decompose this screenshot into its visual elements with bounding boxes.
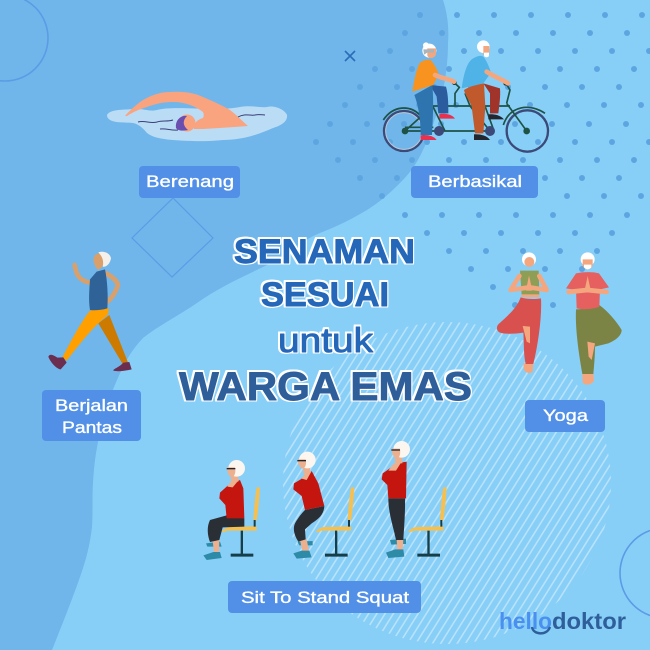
label: Berbasikal: Berbasikal xyxy=(428,172,522,191)
standing woman xyxy=(382,441,410,558)
decorative cross xyxy=(345,51,355,61)
title line: SESUAI: SESUAI xyxy=(261,276,389,314)
swim cap xyxy=(176,116,188,131)
logo: hellodoktor xyxy=(499,608,626,634)
water ripples xyxy=(138,115,265,130)
dot pattern xyxy=(313,12,650,308)
title xyxy=(179,233,472,409)
icon: yoga couple xyxy=(497,252,622,385)
icon: sit to stand squat xyxy=(203,441,447,560)
squatting woman xyxy=(293,452,324,559)
label: Yoga: Yoga xyxy=(543,406,589,425)
title line: untuk: untuk xyxy=(278,322,374,360)
decorative circle top left xyxy=(0,0,48,81)
yoga man xyxy=(566,252,622,385)
far leg xyxy=(98,315,128,364)
label: Yoga xyxy=(525,400,605,432)
swimmer body xyxy=(125,92,248,129)
head xyxy=(93,253,104,270)
title line: WARGA EMAS: WARGA EMAS xyxy=(179,365,472,409)
label: Sit To Stand Squat: Sit To Stand Squat xyxy=(241,588,409,607)
near leg xyxy=(62,308,109,361)
logo: hellodoktor: hello xyxy=(499,608,552,634)
arms xyxy=(75,265,118,302)
darker background blob xyxy=(0,0,448,650)
label: Berjalan Pantas: Pantas xyxy=(62,418,122,437)
decorative circle bottom right xyxy=(620,528,650,618)
title line: SENAMAN: SENAMAN xyxy=(234,233,415,271)
label: Berenang xyxy=(139,166,240,198)
sitting woman xyxy=(203,460,245,560)
hair xyxy=(98,252,111,267)
logo: hellodoktor: doktor xyxy=(552,608,626,634)
hatched circle xyxy=(283,322,611,644)
top xyxy=(89,269,108,310)
label: Berjalan Pantas: Berjalan xyxy=(55,396,128,415)
icon: tandem bicycle riders xyxy=(383,40,548,152)
woman rider xyxy=(412,42,455,140)
label: Berbasikal xyxy=(411,166,538,198)
water xyxy=(107,106,287,141)
man rider xyxy=(462,40,508,140)
bicycle xyxy=(383,80,548,152)
shoes xyxy=(48,355,132,371)
chair 3 xyxy=(408,487,447,557)
chair 2 xyxy=(316,487,354,557)
icon: brisk walker xyxy=(48,252,132,371)
yoga woman xyxy=(497,252,547,373)
swimmer head xyxy=(178,114,196,132)
label: Berenang: Berenang xyxy=(146,172,234,191)
label: Berjalan Pantas xyxy=(42,390,141,441)
label: Sit To Stand Squat xyxy=(228,581,421,613)
chair 1 xyxy=(222,487,260,557)
icon: swimmer xyxy=(107,92,287,141)
decorative diamond xyxy=(132,198,213,277)
